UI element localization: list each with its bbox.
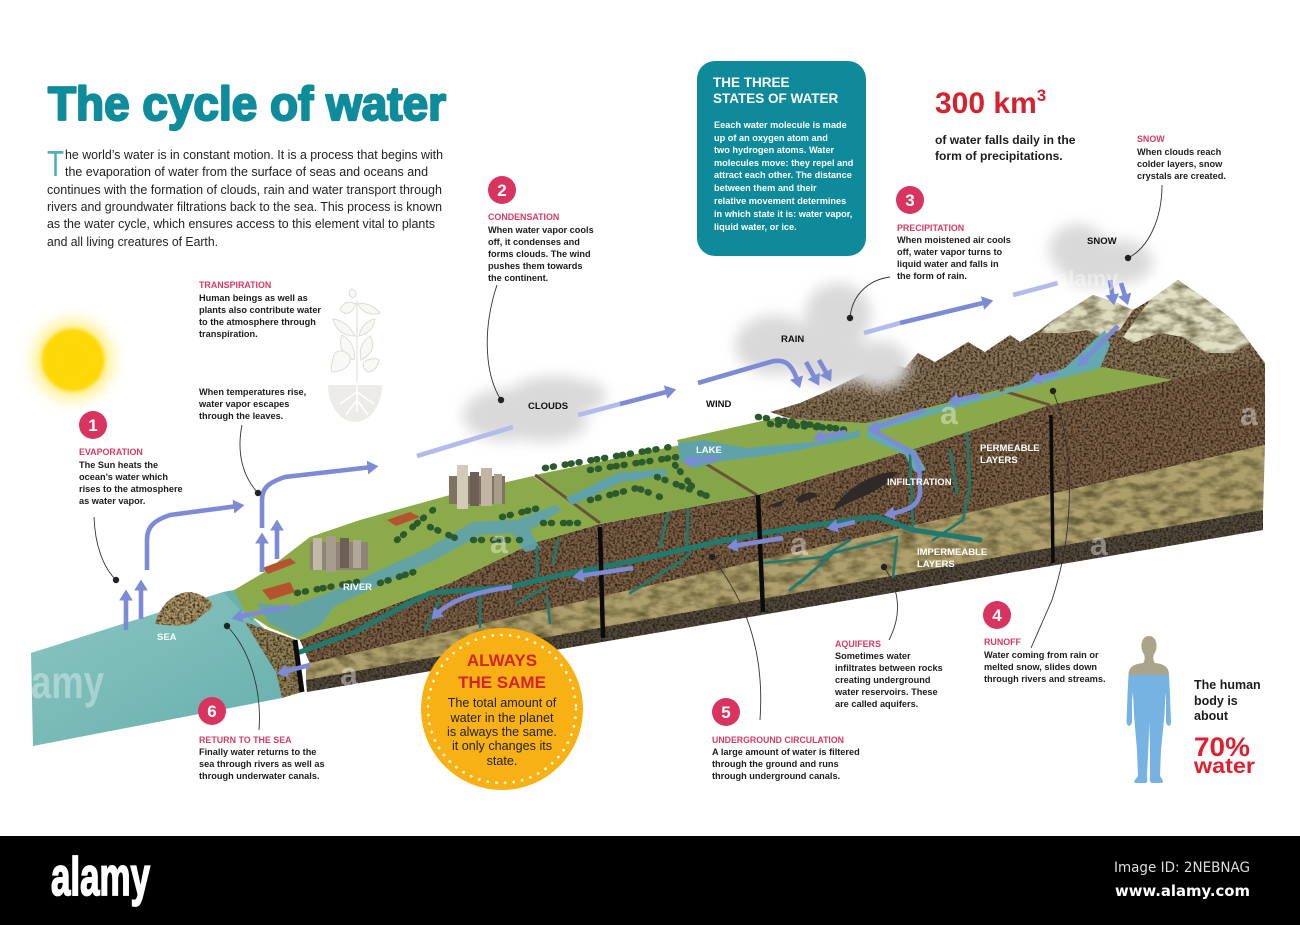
intro text block: continues with the formation of clouds, rain and water transport through [47,183,442,197]
step 4: runoff: melted snow, slides down [984,662,1097,672]
snow text [1137,134,1226,181]
statistic: 300 km3 [935,86,1076,163]
watermarks: a [1240,396,1258,432]
icon: human body 70% water [1126,636,1171,783]
step 5: underground circulation: through the ground and runs [712,759,839,769]
intro text block: the evaporation of water from the surface of seas and oceans and [65,165,428,179]
step 4: runoff: 4 [992,606,1002,625]
panel: the three states of water: molecules move: they repel and [714,158,853,168]
step 3: precipitation [896,186,1011,281]
statistic: 300 km3: of water falls daily in the [935,133,1076,147]
panel: the three states of water: relative movement determines [714,196,846,206]
watermarks [340,266,1258,692]
step 2: condensation: 2 [497,181,507,200]
panel: the three states of water: attract each other. The distance [714,170,852,180]
callout: always the same [421,628,583,790]
transpiration text: to the atmosphere through [199,317,316,327]
callout: always the same: The total amount of [448,696,557,710]
diagram: coal seams [768,472,898,512]
transpiration text: Human beings as well as [199,293,308,303]
snow text: SNOW [1137,134,1165,144]
transpiration text [199,280,321,339]
intro text block: he world’s water is in constant motion. It is a process that begins with [65,148,443,162]
intro text block: as the water cycle, which ensures access to this element vital to plants [47,217,435,231]
aquifers text: water reservoirs. These [834,687,938,697]
step 5: underground circulation: UNDERGROUND CIRCULATION [712,735,844,745]
aquifers text [834,639,943,709]
step 1: evaporation: as water vapor. [79,496,145,506]
step 6: return to the sea [198,697,325,781]
transpiration text: plants also contribute water [199,305,321,315]
step 2: condensation: forms clouds. The wind [488,249,591,259]
step 1: evaporation: ocean’s water which [79,472,168,482]
step 6: return to the sea: through underwater canals. [199,771,319,781]
step 3: precipitation: the form of rain. [897,271,967,281]
step 1: evaporation: EVAPORATION [79,447,143,457]
diagram: city buildings left [310,536,368,572]
panel: the three states of water [697,61,866,256]
step 6: return to the sea: RETURN TO THE SEA [199,735,292,745]
diagram: city buildings right [449,465,505,509]
arrows: rivers and groundwater flow [238,326,1118,672]
step 6: return to the sea: 6 [207,702,217,721]
step 1: evaporation [79,411,183,506]
snow text: crystals are created. [1137,171,1226,181]
aquifers text: AQUIFERS [835,639,881,649]
diagram labels: LAYERS [917,559,955,570]
step 2: condensation: pushes them towards [488,261,582,271]
leader lines [94,185,1162,730]
callout: always the same: state. [487,754,517,768]
step 5: underground circulation [712,698,860,781]
diagram labels: WIND [706,399,731,410]
diagram: clouds [463,224,1153,442]
diagram: rock in sea [155,592,213,626]
aquifers text: are called aquifers. [835,699,918,709]
step 4: runoff: RUNOFF [984,637,1022,647]
step 4: runoff: through rivers and streams. [984,674,1106,684]
leaves text [198,387,306,421]
statistic: 300 km3: 3 [1037,86,1046,105]
diagram labels: LAKE [696,445,722,456]
step 3: precipitation: off, water vapor turns to [897,247,1003,257]
callout: always the same: water in the planet [450,711,554,725]
step 1: evaporation: rises to the atmosphere [79,484,183,494]
panel: the three states of water: THE THREE [713,75,790,90]
watermarks: a [1090,526,1108,562]
text: human body fact: 70% [1194,732,1250,762]
text: human body fact: The human [1194,678,1261,692]
step 3: precipitation: PRECIPITATION [897,223,964,233]
step 3: precipitation: 3 [905,191,915,210]
callout: always the same: it only changes its [452,739,552,753]
diagram: grass surface [234,367,1173,640]
diagram: houses [262,512,420,600]
step 2: condensation: CONDENSATION [488,212,559,222]
panel: the three states of water: Eeach water molecule is made [714,120,847,130]
diagram labels: RAIN [781,334,804,345]
callout: always the same: ALWAYS [467,651,537,670]
transpiration text: transpiration. [199,329,258,339]
diagram: underground water channels [300,433,980,652]
diagram labels: SNOW [1087,236,1117,247]
diagram: mountains [770,280,1265,445]
footer band: www.alamy.com [1115,882,1250,900]
diagram labels: LAYERS [980,455,1018,466]
step 5: underground circulation: through underground canals. [712,771,840,781]
step 2: condensation: the continent. [488,273,548,283]
panel: the three states of water: up of an oxygen atom and [714,133,828,143]
step 1: evaporation: 1 [88,416,98,435]
footer band: alamy [51,847,150,907]
diagram labels: SEA [157,632,177,643]
diagram: black cracks [295,415,1053,692]
panel: the three states of water: in which state it is: water vapor, [714,209,852,219]
step 6: return to the sea: Finally water returns to the [199,747,316,757]
statistic: 300 km3: form of precipitations. [935,149,1063,163]
intro text block [47,143,443,249]
diagram labels: IMPERMEABLE [917,547,987,558]
title: The cycle of water [48,77,446,130]
step 3: precipitation: When moistened air cools [897,235,1011,245]
panel: the three states of water: two hydrogen atoms. Water [714,145,835,155]
panel: the three states of water: between them and their [714,183,817,193]
step 2: condensation [488,176,594,283]
step 2: condensation: When water vapor cools [488,225,594,235]
callout: always the same: THE SAME [458,673,546,692]
text: human body fact: water [1193,755,1255,778]
transpiration text: TRANSPIRATION [199,280,271,290]
aquifers text: infiltrates between rocks [835,663,943,673]
arrows: water vapor and rain [126,280,1126,630]
leaves text: through the leaves. [199,411,283,421]
leaves text: water vapor escapes [198,399,289,409]
diagram labels: CLOUDS [528,401,568,412]
watermarks: a [940,395,958,431]
diagram: land cross-section wall [245,363,1265,698]
leaves text: When temperatures rise, [199,387,306,397]
watermarks: a [340,656,358,692]
footer band [0,836,1300,925]
watermarks: alamy [1056,266,1119,291]
intro text block: rivers and groundwater filtrations back to the sea. This process is known [47,200,442,214]
step 2: condensation: off, it condenses and [488,237,580,247]
statistic: 300 km3: 300 km [935,87,1037,120]
diagram labels: RIVER [343,582,372,593]
text: human body fact: about [1194,709,1229,723]
diagram labels: INFILTRATION [887,477,952,488]
step 3: precipitation: liquid water and falls in [897,259,999,269]
step 6: return to the sea: sea through rivers as well as [199,759,325,769]
callout: always the same: is always the same. [447,725,557,739]
step 4: runoff [983,601,1106,684]
text: human body fact [1193,678,1261,778]
diagram: sea [31,588,300,746]
intro text block: and all living creatures of Earth. [47,235,218,249]
step 1: evaporation: The Sun heats the [79,460,158,470]
step 4: runoff: Water coming from rain or [984,650,1099,660]
aquifers text: creating underground [835,675,930,685]
icon: sun [17,304,129,416]
snow text: When clouds reach [1137,147,1222,157]
aquifers text: Sometimes water [835,651,911,661]
diagram: rivers and lake [257,330,1110,638]
step 5: underground circulation: A large amount of water is filtered [712,747,860,757]
panel: the three states of water: STATES OF WATER [713,91,838,106]
diagram: sea: amy [31,656,104,708]
diagram: trees [297,417,847,593]
icon: plant [328,289,382,422]
watermarks: a [490,524,508,560]
intro text block: T [47,143,64,184]
diagram labels [157,236,1117,643]
watermarks: a [790,526,808,562]
text: human body fact: body is [1194,694,1238,708]
diagram labels: PERMEABLE [980,443,1040,454]
footer band: Image ID: 2NEBNAG [1114,860,1250,876]
step 5: underground circulation: 5 [721,703,731,722]
snow text: colder layers, snow [1137,159,1223,169]
panel: the three states of water: liquid water, or ice. [714,222,797,232]
